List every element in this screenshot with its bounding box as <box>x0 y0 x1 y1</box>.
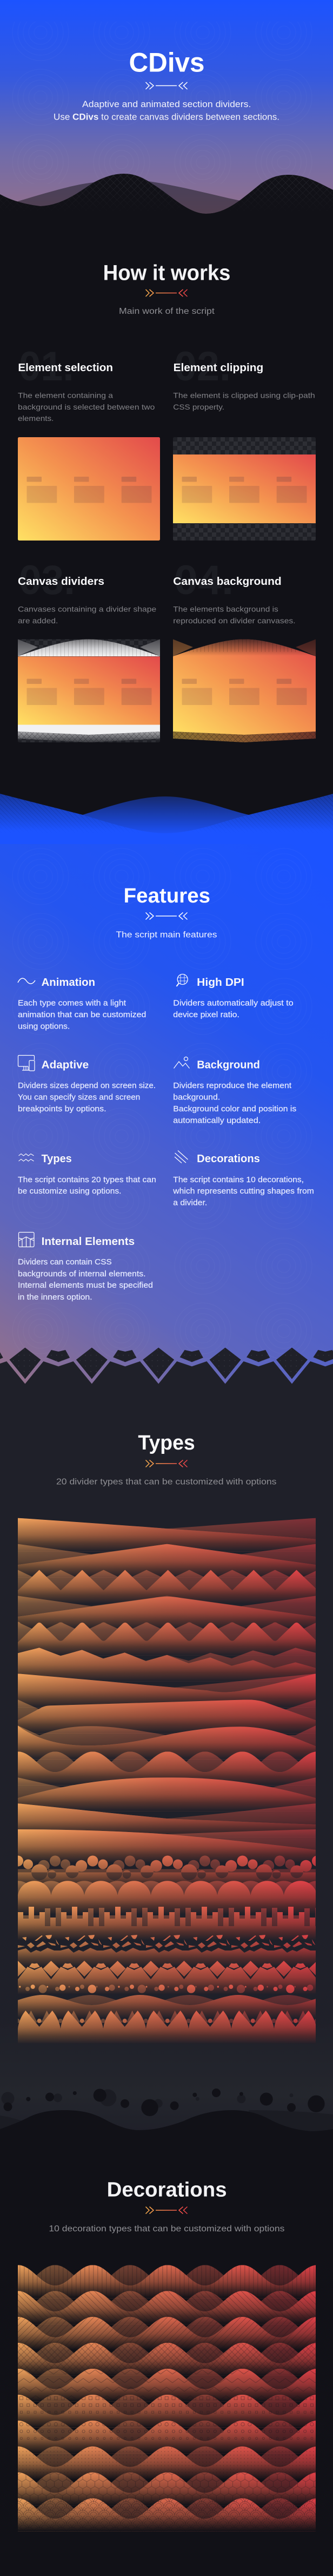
type 9 <box>18 1725 316 1759</box>
hero description: Adaptive and animated section dividers. <box>82 100 251 109</box>
step title: Canvas background <box>173 576 282 588</box>
step text <box>18 605 156 625</box>
feature title: Animation <box>42 977 95 989</box>
feature text: breakpoints by options. <box>18 1105 106 1114</box>
step text: elements. <box>18 414 54 423</box>
type 17: shards <box>18 1933 316 1967</box>
feature text <box>18 999 146 1031</box>
feature text <box>18 1082 156 1114</box>
feature: adaptive <box>18 1055 156 1114</box>
type 20: spikes <box>18 2011 316 2044</box>
divider: floating front circles <box>3 2089 325 2116</box>
divider: back wave <box>18 179 241 216</box>
type 7 <box>18 1674 316 1707</box>
panel: how it works <box>18 264 316 742</box>
decoration 8: dots <box>18 2447 316 2479</box>
heading: Features <box>124 885 210 907</box>
icon: mountains and sun <box>174 1057 189 1068</box>
icon: magnifier with grid <box>176 974 188 986</box>
hero texture <box>0 22 333 184</box>
divider: diagonal hatch decoration <box>0 794 333 830</box>
hero ornament <box>146 82 187 89</box>
decoration 5: zigzag <box>18 2369 316 2402</box>
feature text <box>172 1176 314 1208</box>
step 04: canvas background <box>173 557 316 742</box>
panel: decorations <box>0 2089 333 2576</box>
icon: monitor and phone <box>18 1055 35 1071</box>
decoration 7: circles <box>18 2421 316 2454</box>
divider: floating back circles <box>1 2090 293 2108</box>
step 01: element selection <box>18 344 160 541</box>
features texture <box>0 844 333 1380</box>
feature text: be customize using options. <box>18 1187 121 1196</box>
chart: 20 divider types <box>18 1518 316 2044</box>
type 4 <box>18 1596 316 1630</box>
panel: features <box>0 779 333 1391</box>
type 13 <box>18 1829 316 1863</box>
illustration: selected element <box>18 437 160 541</box>
type 10 <box>18 1751 316 1785</box>
feature title: Internal Elements <box>42 1236 135 1248</box>
illustration: clipped element <box>173 437 316 541</box>
step 03: canvas dividers <box>18 557 160 742</box>
step text: are added. <box>18 616 58 625</box>
subheading: The script main features <box>116 931 217 940</box>
ornament <box>146 912 187 920</box>
feature text: Internal elements must be specified <box>18 1281 153 1290</box>
feature text: in the inners option. <box>18 1293 92 1302</box>
feature text: animation that can be customized <box>18 1011 146 1019</box>
chart: 10 decoration types <box>18 2265 316 2531</box>
step number: 04. <box>174 557 234 603</box>
feature: high dpi <box>173 974 294 1019</box>
hero description: Use CDivs to create canvas dividers between sections. <box>54 113 279 122</box>
type 14: clouds <box>18 1856 316 1889</box>
hero title: CDivs <box>129 48 204 78</box>
feature text <box>18 1176 156 1196</box>
step text <box>173 605 296 625</box>
feature text: a divider. <box>173 1199 207 1208</box>
heading: How it works <box>103 261 230 285</box>
illustration: canvas dividers in white <box>18 640 160 742</box>
step title: Element selection <box>18 362 113 374</box>
step title: Element clipping <box>174 362 263 374</box>
feature text: Each type comes with a light <box>18 999 126 1007</box>
decoration 2: back diagonal lines <box>18 2291 316 2324</box>
feature text: background. <box>173 1093 220 1102</box>
feature text <box>173 1082 296 1125</box>
step text: Canvases containing a divider shape <box>18 605 156 614</box>
divider: cross-hatch decoration <box>0 172 333 215</box>
step text: reproduced on divider canvases. <box>173 616 296 625</box>
illustration: background reproduced on canvases <box>173 639 316 742</box>
feature text: automatically updated. <box>173 1116 261 1125</box>
feature title: Decorations <box>197 1153 260 1165</box>
panel: hero <box>0 0 333 216</box>
step text: The elements background is <box>173 605 278 614</box>
step text: background is selected between two <box>18 403 155 411</box>
feature title: High DPI <box>197 977 244 989</box>
step 02: element clipping <box>173 344 316 541</box>
divider: dot decoration <box>0 1348 333 1379</box>
feature text: Dividers automatically adjust to <box>173 999 294 1007</box>
decoration 1: vertical lines <box>18 2265 316 2298</box>
feature title: Adaptive <box>42 1059 89 1071</box>
feature text <box>18 1258 153 1302</box>
decoration 3: forward diagonal lines <box>18 2317 316 2350</box>
feature text: The script contains 10 decorations, <box>173 1176 304 1184</box>
step text: The element containing a <box>18 391 113 399</box>
ornament <box>146 2206 187 2214</box>
divider: blue front wave <box>0 794 333 844</box>
subheading: Main work of the script <box>119 307 215 316</box>
feature text: device pixel ratio. <box>173 1011 239 1019</box>
feature: animation <box>18 977 146 1031</box>
type 5 <box>18 1622 316 1655</box>
feature: types <box>18 1153 156 1196</box>
section background <box>0 1384 333 2132</box>
feature text: Background color and position is <box>173 1105 296 1114</box>
icon: frame with divider <box>18 1233 34 1247</box>
heading: Types <box>138 1432 195 1454</box>
hero gradient background <box>0 0 333 216</box>
feature text: You can specify sizes and screen <box>18 1093 140 1102</box>
icon: wavy lines <box>18 1154 34 1161</box>
dark background <box>0 214 333 836</box>
hero description <box>54 100 279 122</box>
decoration 4: crosshatch <box>18 2343 316 2376</box>
type 2 <box>18 1544 316 1578</box>
divider: front wave <box>0 2110 333 2576</box>
step title: Canvas dividers <box>18 576 104 588</box>
subheading: 10 decoration types that can be customized with options <box>49 2224 285 2234</box>
ornament <box>146 289 187 297</box>
feature: internal elements <box>18 1233 153 1302</box>
feature text: using options. <box>18 1023 70 1031</box>
type 3 <box>18 1570 316 1604</box>
icon: diagonal lines <box>175 1150 188 1163</box>
step text <box>18 391 155 423</box>
divider: floating diamonds <box>0 1348 333 1379</box>
type 1 <box>18 1518 316 1552</box>
type 16: bars <box>18 1907 316 1940</box>
step text: The element is clipped using clip-path <box>173 391 315 399</box>
type 15: arcs <box>18 1881 316 1914</box>
panel: types <box>0 1348 333 2132</box>
type 12 <box>18 1803 316 1837</box>
decoration 9: hexagons <box>18 2472 316 2505</box>
type 8 <box>18 1699 316 1733</box>
ornament <box>146 1460 187 1467</box>
step number: 01. <box>19 344 74 390</box>
heading: Decorations <box>107 2178 227 2201</box>
step number: 03. <box>19 557 75 603</box>
feature title: Background <box>197 1059 260 1071</box>
feature text: backgrounds of internal elements. <box>18 1270 146 1279</box>
type 18: diamonds <box>18 1961 316 1994</box>
type 19: dots and wave <box>18 1985 316 2018</box>
divider: front wave <box>0 174 333 216</box>
feature text: Dividers reproduce the element <box>173 1082 291 1090</box>
feature text: which represents cutting shapes from <box>172 1187 314 1196</box>
feature text <box>173 999 294 1019</box>
feature: decorations <box>172 1150 314 1208</box>
subheading: 20 divider types that can be customized with options <box>56 1478 277 1487</box>
divider: blue back wave <box>83 796 249 836</box>
divider: dark top cap <box>0 779 333 839</box>
feature title: Types <box>42 1153 72 1165</box>
type 11 <box>18 1777 316 1811</box>
type 6 <box>18 1648 316 1681</box>
feature text: The script contains 20 types that can <box>18 1176 156 1184</box>
decoration 6: squares <box>18 2395 316 2428</box>
divider: zigzag body <box>0 1361 333 1407</box>
features gradient background <box>0 822 333 1391</box>
decoration 10: scales <box>18 2498 316 2531</box>
divider: back wave <box>0 2110 333 2132</box>
feature text: Dividers sizes depend on screen size. <box>18 1082 156 1090</box>
feature text: Dividers can contain CSS <box>18 1258 112 1267</box>
feature: background <box>173 1057 296 1125</box>
step text <box>173 391 315 411</box>
step text: CSS property. <box>173 403 224 411</box>
icon: wave <box>18 978 35 984</box>
step number: 02. <box>174 344 231 390</box>
